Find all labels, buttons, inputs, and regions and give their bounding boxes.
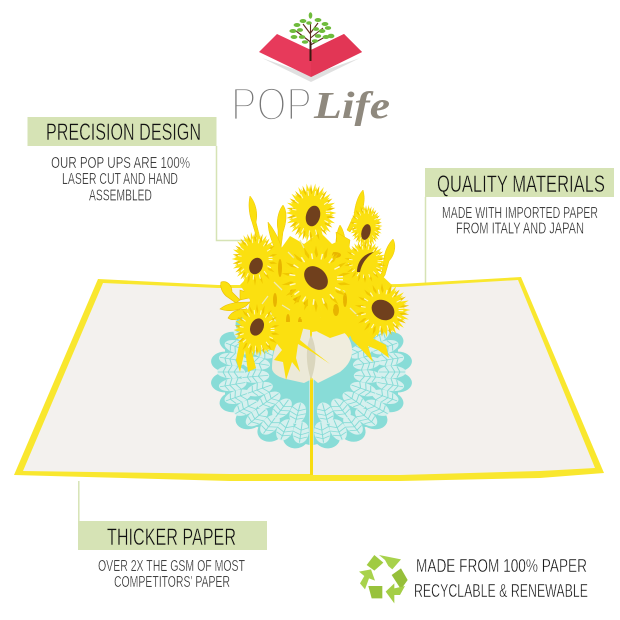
bouquet: buds and stems [249,190,395,290]
sunflower: middle right [341,238,389,286]
icon: recycle arrows [359,555,408,603]
body: thicker paper: OVER 2X THE GSM OF MOST [98,558,245,575]
heading box: thicker paper [78,521,267,550]
doily: plain teal centre [270,340,354,398]
heading: thicker paper: THICKER PAPER [107,524,236,551]
sunflower: right [350,279,414,341]
sunflower: lower left [231,300,283,360]
sunflower: upper right [348,202,384,250]
bouquet: foliage mass [240,232,392,352]
sunflower bouquet [220,180,414,383]
sunflower: left [229,228,281,290]
card: yellow cover [14,277,604,481]
body: thicker paper: COMPETITORS' PAPER [114,574,230,591]
logo: tree [289,12,334,61]
logo: red book chevron [259,34,362,82]
bouquet: left leaves [220,282,258,320]
open pop-up card [14,277,604,481]
body: quality materials [442,205,598,238]
sunflower: centre [276,241,356,317]
vase [272,328,352,383]
heading box: precision design [28,117,216,146]
sunflower: top [282,180,340,246]
logo: POP wordmark: POP [231,78,312,130]
logo: Life wordmark: Life [313,85,390,127]
callout: precision design [28,117,216,204]
body: precision design: LASER CUT AND HAND [62,171,178,188]
logo [231,12,390,130]
bouquet: inner shading and cut-outs [262,240,358,328]
callout: thicker paper [78,521,267,591]
heading box: quality materials [425,168,614,197]
text: recycling claim [414,555,588,601]
body: precision design: OUR POP UPS ARE 100% [51,155,190,172]
card: left inner page [23,283,310,474]
callout: quality materials [425,168,614,238]
teal lace doily [209,310,414,450]
heading: precision design: PRECISION DESIGN [46,119,201,146]
connector lines [79,146,426,521]
doily: left half [209,310,311,450]
body: precision design [51,155,190,204]
card: right inner page [313,280,595,475]
doily: right half [312,310,414,450]
card: centre fold [310,380,313,475]
body: precision design: ASSEMBLED [89,188,152,204]
recycling badge [359,555,588,603]
bouquet: front leaves over vase [236,318,389,380]
body: thicker paper [98,558,245,591]
